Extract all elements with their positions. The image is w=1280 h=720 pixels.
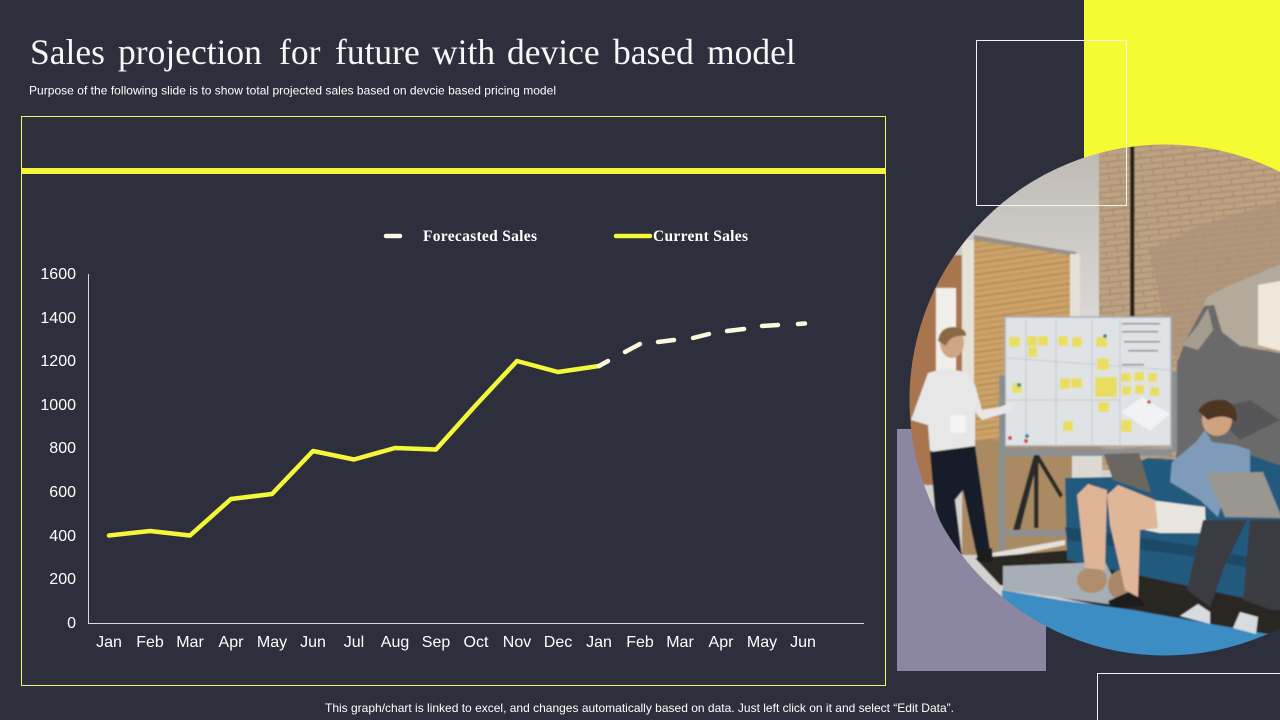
glass wall with brick xyxy=(974,237,1076,440)
brick wall xyxy=(1099,140,1280,470)
blue table top xyxy=(1001,589,1270,656)
x axis labels: Apr xyxy=(219,634,244,651)
x axis labels: Jan xyxy=(586,634,612,651)
line chart: sales by month xyxy=(40,266,864,651)
y axis labels xyxy=(40,266,76,632)
lamp shade xyxy=(1258,280,1280,352)
y axis labels: 1000 xyxy=(40,397,76,414)
floor xyxy=(975,550,1280,640)
y axis labels: 1600 xyxy=(40,266,76,283)
x axis labels: Sep xyxy=(422,634,450,651)
photo: team meeting in circle xyxy=(905,140,1280,670)
seated man on sofa xyxy=(1077,400,1250,597)
chart legend xyxy=(386,228,748,245)
title: future xyxy=(335,32,420,72)
title: model xyxy=(707,32,796,72)
outline square bottom xyxy=(1098,674,1280,720)
forecasted sales line xyxy=(599,324,805,366)
title: projection xyxy=(118,32,262,72)
x axis labels: Dec xyxy=(544,634,572,651)
whiteboard stand and tripod xyxy=(992,372,1177,565)
x axis labels: Nov xyxy=(503,634,531,651)
wall pipe xyxy=(1130,146,1134,318)
subtitle: Purpose of the following slide is to show total projected sales based on devcie based pricing model xyxy=(29,84,556,98)
x axis labels: Jul xyxy=(344,634,364,651)
sofa xyxy=(1065,455,1280,607)
current sales line xyxy=(109,361,599,536)
x axis labels xyxy=(96,634,816,651)
x axis labels: Jun xyxy=(300,634,326,651)
title: Sales xyxy=(30,32,105,72)
whiteboard xyxy=(1005,317,1171,446)
footer note: This graph/chart is linked to excel, and changes automatically based on data. Just left click on it and select “Edit Data”. xyxy=(325,701,954,715)
bare legs xyxy=(1077,484,1107,570)
side window and wood xyxy=(905,255,963,485)
x axis labels: Aug xyxy=(381,634,409,651)
x axis labels: Oct xyxy=(464,634,489,651)
y axis labels: 800 xyxy=(49,440,76,457)
x axis labels: May xyxy=(257,634,287,651)
concrete wall patch xyxy=(1176,305,1280,480)
decorative lavender block xyxy=(897,429,1046,671)
title: device xyxy=(507,32,600,72)
x axis labels: Apr xyxy=(709,634,734,651)
second person on sofa xyxy=(1187,520,1280,610)
y axis labels: 1400 xyxy=(40,310,76,327)
title: based xyxy=(613,32,694,72)
x axis labels: Mar xyxy=(666,634,694,651)
x axis labels: Jun xyxy=(790,634,816,651)
decorative yellow block xyxy=(1084,0,1280,300)
x axis labels: Jan xyxy=(96,634,122,651)
y axis labels: 0 xyxy=(67,615,76,632)
y axis labels: 1200 xyxy=(40,353,76,370)
lower wall brick xyxy=(962,440,1102,555)
laptop: dark xyxy=(1104,453,1151,493)
table reflection xyxy=(1003,562,1125,604)
y axis labels: 400 xyxy=(49,528,76,545)
sticky notes xyxy=(1009,336,1159,432)
laptop: silver xyxy=(1206,472,1280,518)
title: with xyxy=(432,32,495,72)
presenter xyxy=(911,327,1013,562)
mottled plaster xyxy=(1177,262,1280,360)
panel: chart frame xyxy=(21,116,886,686)
x axis labels: Feb xyxy=(626,634,654,651)
title: for xyxy=(279,32,321,72)
x axis labels: May xyxy=(747,634,777,651)
x axis labels: Feb xyxy=(136,634,164,651)
y axis labels: 200 xyxy=(49,571,76,588)
white sneakers xyxy=(1180,604,1210,624)
chart legend: Forecasted Sales xyxy=(423,228,537,245)
y axis labels: 600 xyxy=(49,484,76,501)
x axis labels: Mar xyxy=(176,634,204,651)
chart legend: Current Sales xyxy=(653,228,748,245)
panel header rule xyxy=(21,168,886,174)
outline square top xyxy=(976,40,1126,206)
